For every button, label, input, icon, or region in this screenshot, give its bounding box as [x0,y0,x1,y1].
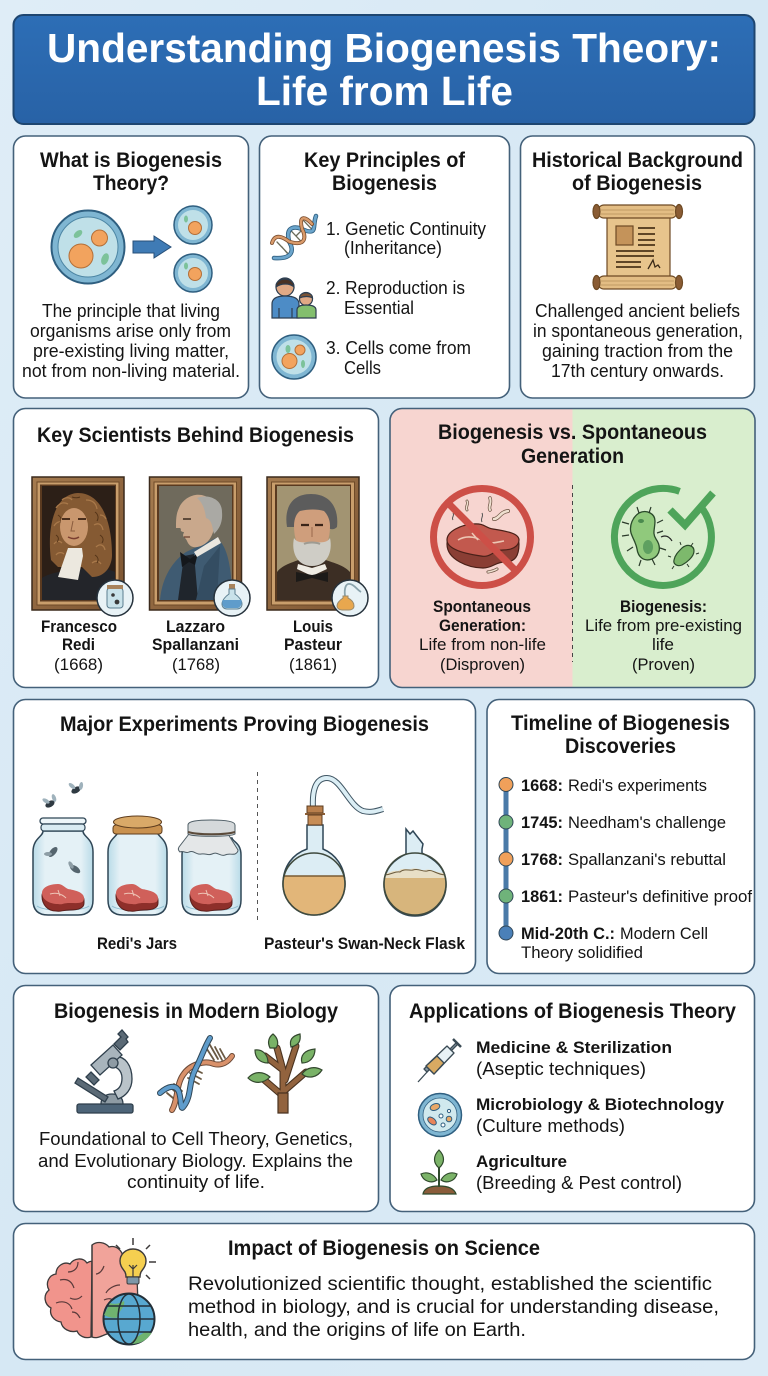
text: timeline entries: Mid-20th C.: [521,924,615,943]
text: definition: The principle that living [42,301,220,321]
heading: what is biogenesis [40,149,222,195]
text: timeline entries: Modern Cell [620,924,708,943]
heading: what is biogenesis: What is Biogenesis [40,149,222,172]
text: timeline entries: 1861: [521,887,563,906]
icon: open jar with meat [33,818,93,915]
heading: impact: Impact of Biogenesis on Science [228,1237,540,1260]
icon: gauze-covered jar with meat [178,820,241,915]
panel: historical background [520,136,754,398]
text: definition: organisms arise only from [30,321,231,341]
text: principle 3: 3. Cells come from [326,338,471,358]
heading: biogenesis vs spontaneous generation [438,421,707,468]
text: modern biology [38,1129,353,1192]
text: timeline entries: Pasteur's definitive proof [568,887,752,906]
panel: key scientists [14,408,378,688]
text: principle 1: 1. Genetic Continuity [326,219,486,239]
text: medicine: Medicine & Sterilization [476,1038,672,1057]
text: timeline entries: Redi's experiments [568,776,707,795]
heading: key scientists: Key Scientists Behind Biogenesis [37,424,354,447]
portrait: Francesco Redi [32,477,124,610]
label: Redi's jars: Redi's Jars [97,935,177,953]
icon: flask badge [214,580,250,616]
text: definition: not from non-living material. [22,361,240,381]
heading: major experiments: Major Experiments Proving Biogenesis [60,713,429,736]
text: biogenesis proven: Life from pre-existing [585,616,742,635]
text: principle 2: Essential [344,298,414,318]
panel: what is biogenesis theory [14,136,248,398]
text: biogenesis proven: Biogenesis: [620,598,707,616]
label: Spallanzani: Lazzaro [166,618,225,636]
text: timeline entries: Needham's challenge [568,813,726,832]
text: spontaneous generation: Life from non-life [419,635,546,654]
title banner: Life from Life [256,68,513,114]
text: history [533,301,743,381]
label: Pasteur: (1861) [289,655,337,674]
heading: key principles: Key Principles of [304,149,466,172]
text: spontaneous generation: Spontaneous [433,598,531,616]
panel: modern biology [14,986,378,1212]
heading: what is biogenesis: Theory? [93,172,169,195]
icon: prohibited meat with maggots [434,488,530,586]
icon: syringe [418,1039,461,1082]
heading: historical background: Historical Background [532,149,743,172]
text: modern biology: and Evolutionary Biology. Explains the [38,1151,353,1171]
label: Pasteur: Louis [293,618,333,636]
heading: timeline: Discoveries [565,735,676,758]
label: Pasteur: Pasteur [284,636,343,654]
icon: dna [272,216,316,258]
heading: applications: Applications of Biogenesis Theory [409,1000,736,1023]
label: Pasteur [284,618,343,674]
text: timeline entries [521,776,752,962]
text: principle 2: 2. Reproduction is [326,278,465,298]
icon: bacteria reproducing with checkmark [614,488,713,585]
text: medicine [476,1038,672,1079]
icon: broken-neck flask [384,829,446,918]
text: spontaneous generation: (Disproven) [440,655,525,674]
text: principle 3 [326,338,471,378]
text: definition [22,301,240,381]
icon: petri dish [418,1094,462,1136]
panel: major experiments [14,700,476,974]
label: Pasteur's flask: Pasteur's Swan-Neck Flask [264,935,466,953]
text: biogenesis proven: (Proven) [632,655,695,674]
heading: historical background [532,149,743,195]
text: definition: pre-existing living matter, [33,341,229,361]
text: timeline entries: Theory solidified [521,943,643,962]
icon: jar badge [97,580,133,616]
text: history: in spontaneous generation, [533,321,743,341]
icon: sealed jar with meat [108,816,167,915]
text: agriculture: (Breeding & Pest control) [476,1173,682,1193]
title banner [14,15,754,124]
portrait: Lazzaro Spallanzani [150,477,242,610]
text: microbiology: (Culture methods) [476,1116,625,1136]
text: microbiology: Microbiology & Biotechnology [476,1095,725,1114]
heading: key principles [304,149,466,195]
text: timeline entries: Spallanzani's rebuttal [568,850,726,869]
text: principle 1: (Inheritance) [344,238,442,258]
label: Redi: (1668) [54,655,103,674]
panel: impact on science [14,1224,754,1360]
text: principle 1 [326,219,486,258]
panel: biogenesis vs spontaneous generation [390,408,755,688]
heading: historical background: of Biogenesis [572,172,702,195]
heading: timeline [511,712,730,758]
label: Redi: Redi [62,636,95,654]
panel: key principles [260,136,510,398]
icon: microscope [75,1030,133,1113]
label: Spallanzani [152,618,239,674]
text: biogenesis proven [585,598,742,674]
icon: cell dividing into two cells [52,206,212,292]
text: timeline entries: 1768: [521,850,563,869]
icon: parchment scroll [593,204,682,290]
text: biogenesis proven: life [652,635,674,654]
text: medicine: (Aseptic techniques) [476,1059,646,1079]
icon: parent and child [272,278,316,318]
text: spontaneous generation [419,598,546,674]
portrait: Louis Pasteur [267,477,359,610]
label: Spallanzani: Spallanzani [152,636,239,654]
label: Spallanzani: (1768) [172,655,220,674]
heading: biogenesis vs spontaneous generation: Biogenesis vs. Spontaneous [438,421,707,444]
text: history: 17th century onwards. [551,361,724,381]
text: timeline entries: 1668: [521,776,563,795]
heading: timeline: Timeline of Biogenesis [511,712,730,735]
title banner: Understanding Biogenesis Theory: [47,25,721,71]
text: impact [188,1273,719,1341]
icon: swan-neck flask [283,778,383,916]
text: principle 3: Cells [344,358,381,378]
heading: biogenesis vs spontaneous generation: Generation [521,445,624,468]
text: history: gaining traction from the [542,341,733,361]
text: modern biology: continuity of life. [127,1172,265,1192]
panel: applications [390,986,754,1212]
icon: dna helix [160,1038,232,1110]
text: modern biology: Foundational to Cell Theory, Genetics, [39,1129,353,1149]
label: Redi [41,618,117,674]
text: spontaneous generation: Generation: [439,617,526,635]
chart: timeline line and dots [499,778,513,940]
label: Redi: Francesco [41,618,117,636]
text: impact: health, and the origins of life on Earth. [188,1319,526,1341]
text: impact: Revolutionized scientific thought, established the scientific [188,1273,712,1295]
icon: swan-neck flask badge [332,580,368,616]
text: principle 2 [326,278,465,318]
icon: brain, lightbulb and globe [45,1238,156,1344]
icon: tree [248,1034,322,1113]
icon: sprout [421,1150,457,1194]
text: history: Challenged ancient beliefs [535,301,740,321]
heading: key principles: Biogenesis [332,172,437,195]
heading: modern biology: Biogenesis in Modern Biology [54,1000,338,1023]
icon: cell [272,335,316,379]
text: microbiology [476,1095,725,1136]
panel: timeline [487,700,754,974]
text: agriculture [476,1152,682,1193]
icon: flies [42,782,84,809]
text: impact: method in biology, and is crucial for understanding disease, [188,1296,719,1318]
text: agriculture: Agriculture [476,1152,567,1171]
text: timeline entries: 1745: [521,813,563,832]
